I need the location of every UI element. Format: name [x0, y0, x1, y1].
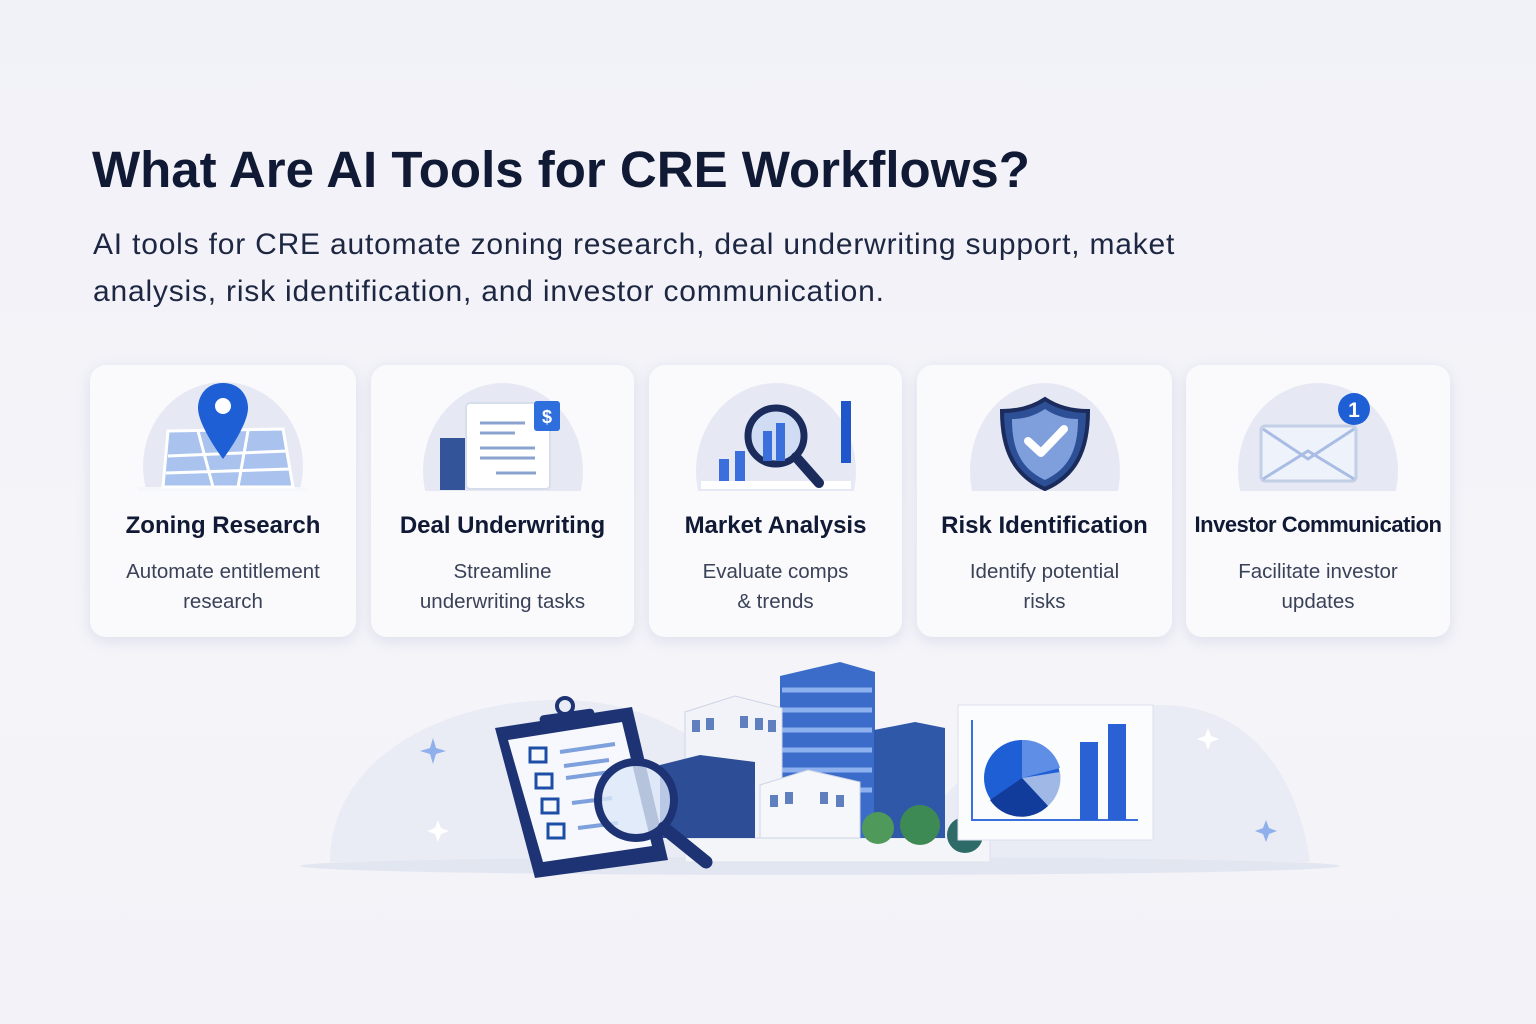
title: What Are AI Tools for CRE Workflows?	[92, 141, 1030, 198]
card desc: & trends	[737, 590, 814, 613]
icon: map pin	[143, 382, 303, 487]
card desc: updates	[1282, 590, 1354, 613]
icon: envelope	[1238, 383, 1398, 491]
panel: zoning research	[90, 365, 356, 637]
panel: market analysis	[649, 365, 902, 637]
card desc: underwriting tasks	[420, 590, 585, 613]
icon: document: $	[541, 407, 552, 427]
card desc	[1238, 560, 1398, 613]
illustration: city scene	[300, 662, 1340, 878]
card desc: Evaluate comps	[703, 560, 848, 583]
card desc: Identify potential	[970, 560, 1119, 583]
panel: risk identification	[917, 365, 1172, 637]
card desc	[126, 560, 320, 613]
icon: envelope: 1	[1348, 399, 1360, 422]
card desc	[970, 560, 1119, 613]
subtitle: AI tools for CRE automate zoning research, deal underwriting support, maket analysis, risk identification, and investor communication.	[93, 228, 1175, 308]
card title: Zoning Research	[126, 512, 320, 539]
card title: Deal Underwriting	[400, 512, 605, 539]
panel: investor communication	[1186, 365, 1450, 637]
card desc	[420, 560, 585, 613]
chart board	[958, 705, 1153, 840]
card desc: Facilitate investor	[1238, 560, 1398, 583]
card desc: Automate entitlement	[126, 560, 320, 583]
card desc	[703, 560, 848, 613]
card desc: risks	[1023, 590, 1066, 613]
card title: Risk Identification	[941, 512, 1148, 539]
buildings	[660, 662, 990, 862]
card title: Market Analysis	[685, 512, 866, 539]
card title: Investor Communication	[1195, 512, 1441, 537]
card desc: research	[183, 590, 263, 613]
icon: document	[423, 383, 583, 491]
icon: magnifier chart	[696, 383, 856, 491]
panel: deal underwriting	[371, 365, 634, 637]
sparkles	[420, 738, 1277, 842]
clipboard with magnifier	[495, 698, 706, 878]
icon: shield	[970, 383, 1120, 491]
card desc: Streamline	[454, 560, 552, 583]
